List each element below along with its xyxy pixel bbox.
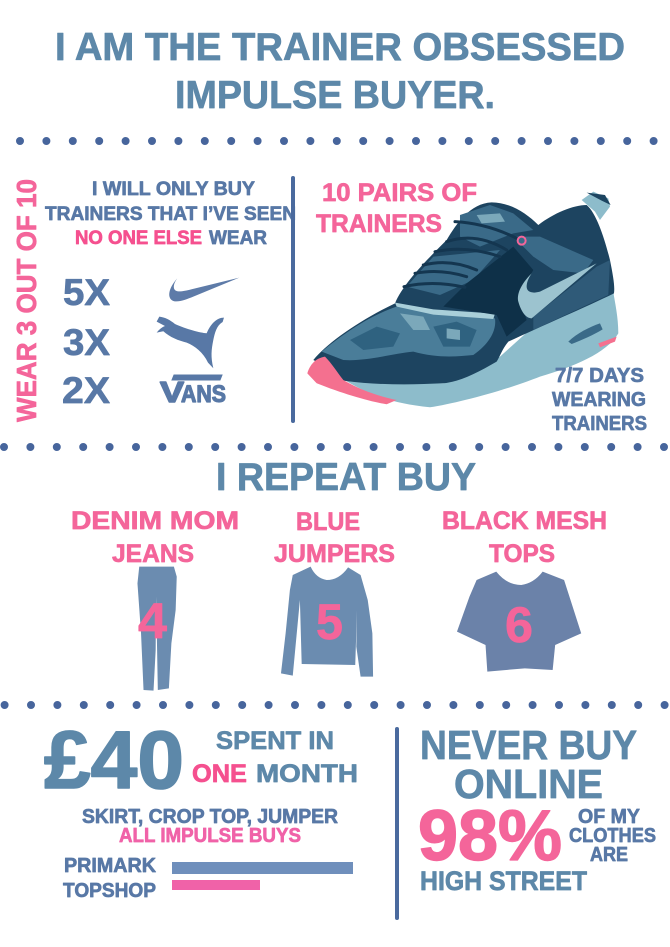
lace area bbox=[407, 250, 500, 295]
brand counts: 5X bbox=[63, 272, 110, 313]
count: tops: 6 bbox=[505, 597, 533, 653]
heel accent bbox=[598, 337, 617, 347]
icon: trainer illustration bbox=[307, 192, 618, 407]
text block: only buy unique trainers: I WILL ONLY BUY bbox=[92, 179, 255, 200]
icon: jumper bbox=[281, 567, 373, 677]
callout: 10 pairs of trainers bbox=[316, 179, 477, 238]
callout: 10 pairs of trainers: 10 PAIRS OF bbox=[322, 179, 477, 207]
text: impulse buys: SKIRT, CROP TOP, JUMPER bbox=[82, 806, 339, 828]
bar chart: primark vs topshop: TOPSHOP bbox=[63, 880, 156, 902]
air window bbox=[568, 323, 603, 344]
icon: swoosh on shoe bbox=[518, 263, 597, 318]
text: of my clothes are: CLOTHES bbox=[569, 825, 656, 847]
heading: i repeat buy: I REPEAT BUY bbox=[216, 456, 476, 499]
text block: only buy unique trainers: NO ONE ELSE bbox=[75, 228, 202, 249]
brand counts bbox=[62, 272, 110, 411]
lace guide ring bbox=[518, 237, 526, 245]
heading: never buy online bbox=[420, 722, 637, 807]
upper bbox=[313, 202, 614, 384]
text block: only buy unique trainers bbox=[45, 179, 296, 249]
label: denim mom jeans bbox=[71, 507, 239, 568]
callout: 7/7 days wearing trainers: TRAINERS bbox=[552, 413, 647, 435]
camo toe bbox=[322, 307, 495, 360]
title: IMPULSE BUYER. bbox=[175, 74, 495, 117]
icon: nike swoosh bbox=[169, 278, 239, 301]
title: I AM THE TRAINER OBSESSED bbox=[55, 26, 625, 69]
collar camo bbox=[513, 237, 593, 273]
text: of my clothes are bbox=[569, 806, 656, 866]
text: impulse buys bbox=[82, 806, 339, 847]
icon: puma bbox=[157, 317, 224, 368]
bar chart: primark vs topshop bbox=[63, 855, 353, 902]
text: spent in one month: ONE bbox=[192, 760, 247, 788]
label: blue jumpers bbox=[274, 508, 395, 568]
label: black mesh tops: BLACK MESH bbox=[442, 507, 607, 535]
title bbox=[55, 26, 625, 117]
callout: 10 pairs of trainers: TRAINERS bbox=[316, 210, 442, 238]
text block: only buy unique trainers: TRAINERS THAT I’VE SEEN bbox=[45, 204, 296, 225]
dark upper bbox=[443, 247, 533, 337]
text: spent in one month bbox=[192, 727, 358, 788]
heading: never buy online: ONLINE bbox=[454, 761, 603, 807]
label: blue jumpers: BLUE bbox=[296, 508, 360, 536]
heading: never buy online: NEVER BUY bbox=[420, 722, 637, 768]
callout: 7/7 days wearing trainers: 7/7 DAYS bbox=[555, 365, 644, 387]
text block: only buy unique trainers: WEAR bbox=[209, 228, 267, 249]
count: jumpers: 5 bbox=[316, 594, 343, 650]
sole bbox=[343, 292, 618, 407]
brand counts: 2X bbox=[62, 370, 110, 411]
text: spent in one month: SPENT IN bbox=[216, 727, 334, 755]
laces bbox=[404, 222, 517, 287]
big number: 98%: 98% bbox=[418, 797, 562, 876]
bar chart: primark vs topshop: PRIMARK bbox=[64, 855, 157, 877]
toe strip bbox=[395, 303, 495, 319]
label: black mesh tops: TOPS bbox=[489, 540, 555, 568]
text: of my clothes are: ARE bbox=[590, 844, 628, 866]
label: blue jumpers: JUMPERS bbox=[274, 540, 395, 568]
text: impulse buys: ALL IMPULSE BUYS bbox=[119, 825, 301, 847]
label: black mesh tops bbox=[442, 507, 607, 568]
text: of my clothes are: OF MY bbox=[578, 806, 641, 828]
label: denim mom jeans: JEANS bbox=[112, 540, 194, 568]
icon: vans logo bbox=[160, 375, 226, 409]
icon: vans logo: V bbox=[160, 377, 185, 409]
heel tab bbox=[582, 192, 610, 220]
callout: 7/7 days wearing trainers bbox=[552, 365, 647, 435]
text: spent in one month: MONTH bbox=[256, 760, 358, 788]
icon: crop top bbox=[457, 572, 581, 672]
icon: jeans bbox=[137, 567, 177, 691]
toe accent bbox=[307, 357, 397, 404]
label: denim mom jeans: DENIM MOM bbox=[71, 507, 239, 535]
icon: vans logo: ANS bbox=[181, 381, 226, 408]
big number: £40: £40 bbox=[44, 715, 184, 806]
text: high street: HIGH STREET bbox=[420, 866, 587, 896]
count: jeans: 4 bbox=[138, 593, 167, 649]
rotated label: wear 3 out of 10: WEAR 3 OUT OF 10 bbox=[11, 179, 42, 422]
brand counts: 3X bbox=[63, 322, 110, 363]
callout: 7/7 days wearing trainers: WEARING bbox=[552, 389, 646, 411]
